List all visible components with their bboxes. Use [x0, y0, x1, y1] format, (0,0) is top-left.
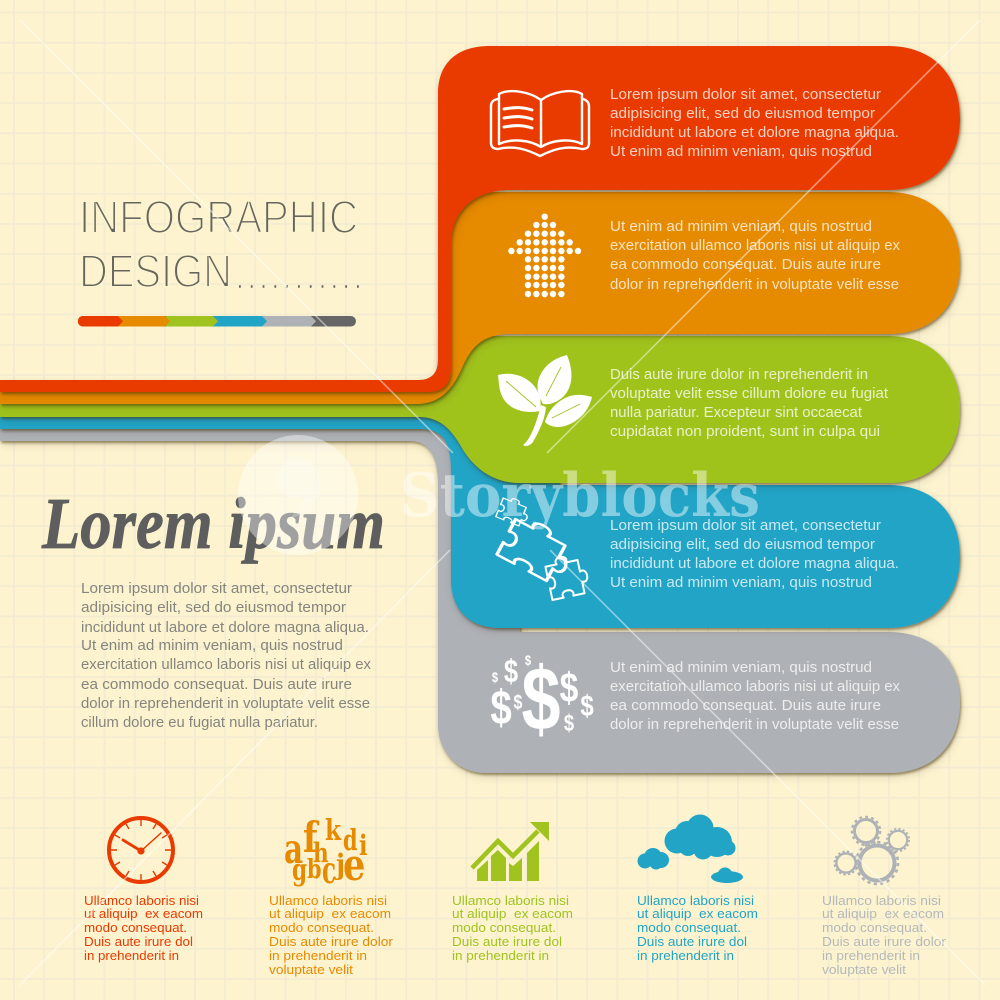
caption: gears: modo consequat.	[822, 920, 927, 935]
caption: clock: Duis aute irure dol	[84, 934, 193, 949]
text: gray panel: exercitation ullamco laboris nisi ut aliquip ex	[610, 679, 901, 695]
panel: blue band and panel	[0, 410, 960, 628]
icon: dotted up arrow	[508, 214, 581, 297]
text: red panel: adipisicing elit, sed do eiusmod tempor	[610, 106, 875, 122]
caption: alphabet: in prehenderit in	[269, 948, 367, 963]
caption: alphabet	[269, 893, 394, 977]
caption: clock: modo consequat.	[84, 920, 187, 935]
text: blue panel	[610, 518, 899, 591]
text block: intro paragraph: incididunt ut labore et dolore magna aliqua.	[81, 620, 369, 636]
text: blue panel: Lorem ipsum dolor sit amet, consectetur	[610, 518, 881, 534]
panel: red band and panel	[0, 46, 960, 392]
caption: alphabet: ut aliquip ex eacom	[269, 906, 391, 921]
icon: dollar signs: $	[521, 650, 561, 750]
caption: clouds: in prehenderit in	[637, 948, 734, 963]
color chevron bar	[78, 316, 356, 326]
text: orange panel: exercitation ullamco laboris nisi ut aliquip ex	[610, 238, 901, 254]
icon: dollar signs: $	[490, 682, 512, 735]
icon: dollar signs	[490, 650, 594, 750]
caption: alphabet: voluptate velit	[269, 962, 353, 977]
title: INFOGRAPHIC	[79, 191, 358, 243]
text: gray panel: ea commodo consequat. Duis aute irure	[610, 698, 881, 714]
caption: alphabet: Duis aute irure dolor	[269, 934, 394, 949]
caption: clock: ut aliquip ex eacom	[84, 906, 203, 921]
icon: alphabet letters: d	[343, 822, 358, 857]
caption: alphabet: modo consequat.	[269, 920, 374, 935]
heading: Lorem ipsum: Lorem ipsum	[41, 483, 385, 564]
icon: leaves	[498, 355, 592, 446]
icon: open book	[491, 91, 589, 156]
text: green panel	[610, 367, 888, 440]
icon: clouds	[638, 814, 743, 883]
caption: clouds: modo consequat.	[637, 920, 741, 935]
text: orange panel: ea commodo consequat. Duis aute irure	[610, 257, 881, 273]
text block: intro paragraph	[81, 581, 372, 731]
text: gray panel: Ut enim ad minim veniam, quis nostrud	[610, 660, 872, 676]
icon: dollar signs: $	[492, 670, 498, 685]
text: red panel	[610, 87, 899, 160]
text block: intro paragraph: ea commodo consequat. Duis aute irure	[81, 677, 352, 693]
icon: alphabet letters: e	[343, 840, 365, 891]
caption: gears: Duis aute irure dolor	[822, 934, 947, 949]
icon: gears	[834, 817, 909, 884]
caption: clouds: ut aliquip ex eacom	[637, 906, 758, 921]
text: blue panel: adipisicing elit, sed do eiusmod tempor	[610, 537, 875, 553]
text: red panel: incididunt ut labore et dolore magna aliqua.	[610, 125, 899, 141]
caption: alphabet: Ullamco laboris nisi	[269, 893, 387, 908]
text: red panel: Lorem ipsum dolor sit amet, consectetur	[610, 87, 881, 103]
icon: dollar signs: $	[514, 691, 522, 713]
icon: clock	[109, 818, 173, 882]
icon: alphabet letters: a	[284, 825, 303, 873]
title dots	[239, 285, 359, 288]
icon: alphabet letters	[284, 812, 368, 893]
caption: chart: ut aliquip ex eacom	[452, 906, 573, 921]
icon: alphabet letters: f	[303, 812, 320, 862]
text block: intro paragraph: Ut enim ad minim veniam, quis nostrud	[81, 638, 343, 654]
icon: dollar signs: $	[504, 654, 518, 690]
text block: intro paragraph: dolor in reprehenderit in voluptate velit esse	[81, 696, 370, 712]
caption: gears	[822, 893, 947, 977]
caption: gears: voluptate velit	[822, 962, 906, 977]
caption: chart: Ullamco laboris nisi	[452, 893, 569, 908]
text block: intro paragraph: Lorem ipsum dolor sit amet, consectetur	[81, 581, 352, 597]
text: orange panel: dolor in reprehenderit in voluptate velit esse	[610, 277, 899, 293]
icon: dollar signs: $	[564, 711, 574, 737]
caption: gears: Ullamco laboris nisi	[822, 893, 941, 908]
text: gray panel: dolor in reprehenderit in voluptate velit esse	[610, 717, 899, 733]
icon: alphabet letters: h	[313, 837, 329, 869]
text: green panel: voluptate velit esse cillum dolore eu fugiat	[610, 386, 888, 402]
caption: chart: in prehenderit in	[452, 948, 549, 963]
caption: gears: ut aliquip ex eacom	[822, 906, 944, 921]
caption: gears: in prehenderit in	[822, 948, 920, 963]
text block: intro paragraph: cillum dolore eu fugiat nulla pariatur.	[81, 715, 318, 731]
panel: orange band and panel	[0, 192, 960, 404]
text: green panel: Duis aute irure dolor in reprehenderit in	[610, 367, 868, 383]
text: green panel: nulla pariatur. Excepteur sint occaecat	[610, 405, 862, 421]
text: red panel: Ut enim ad minim veniam, quis nostrud	[610, 144, 872, 160]
caption: clock	[84, 893, 203, 963]
title	[79, 191, 358, 297]
icon: puzzle pieces	[496, 495, 591, 600]
text: blue panel: Ut enim ad minim veniam, quis nostrud	[610, 575, 872, 591]
caption: chart: modo consequat.	[452, 920, 556, 935]
icon: alphabet letters: i	[359, 828, 368, 862]
text: blue panel: incididunt ut labore et dolore magna aliqua.	[610, 556, 899, 572]
icon: dollar signs: $	[525, 653, 531, 668]
icon: dollar signs: $	[560, 666, 578, 712]
panel: gray band and panel	[0, 420, 960, 773]
text block: intro paragraph: exercitation ullamco laboris nisi ut aliquip ex	[81, 657, 372, 673]
icon: growth chart	[472, 822, 549, 881]
caption: chart	[452, 893, 573, 963]
text block: intro paragraph: adipisicing elit, sed do eiusmod tempor	[81, 600, 346, 616]
caption: clouds: Ullamco laboris nisi	[637, 893, 754, 908]
icon: dollar signs: $	[580, 688, 594, 723]
text: orange panel: Ut enim ad minim veniam, quis nostrud	[610, 219, 872, 235]
caption: clock: in prehenderit in	[84, 948, 179, 963]
caption: clouds	[637, 893, 758, 963]
icon: alphabet letters: b	[307, 854, 322, 885]
watermark: Storyblocks	[400, 461, 760, 531]
icon: alphabet letters: k	[325, 813, 342, 848]
title: DESIGN	[79, 245, 232, 297]
text: orange panel	[610, 219, 901, 293]
text: green panel: cupidatat non proident, sunt in culpa qui	[610, 424, 880, 440]
icon: alphabet letters: g	[292, 852, 307, 888]
caption: clock: Ullamco laboris nisi	[84, 893, 199, 908]
caption: chart: Duis aute irure dol	[452, 934, 562, 949]
text: gray panel	[610, 660, 901, 733]
icon: alphabet letters: j	[334, 849, 345, 881]
panel: green band and panel	[0, 336, 960, 483]
caption: clouds: Duis aute irure dol	[637, 934, 747, 949]
icon: alphabet letters: c	[322, 849, 336, 893]
